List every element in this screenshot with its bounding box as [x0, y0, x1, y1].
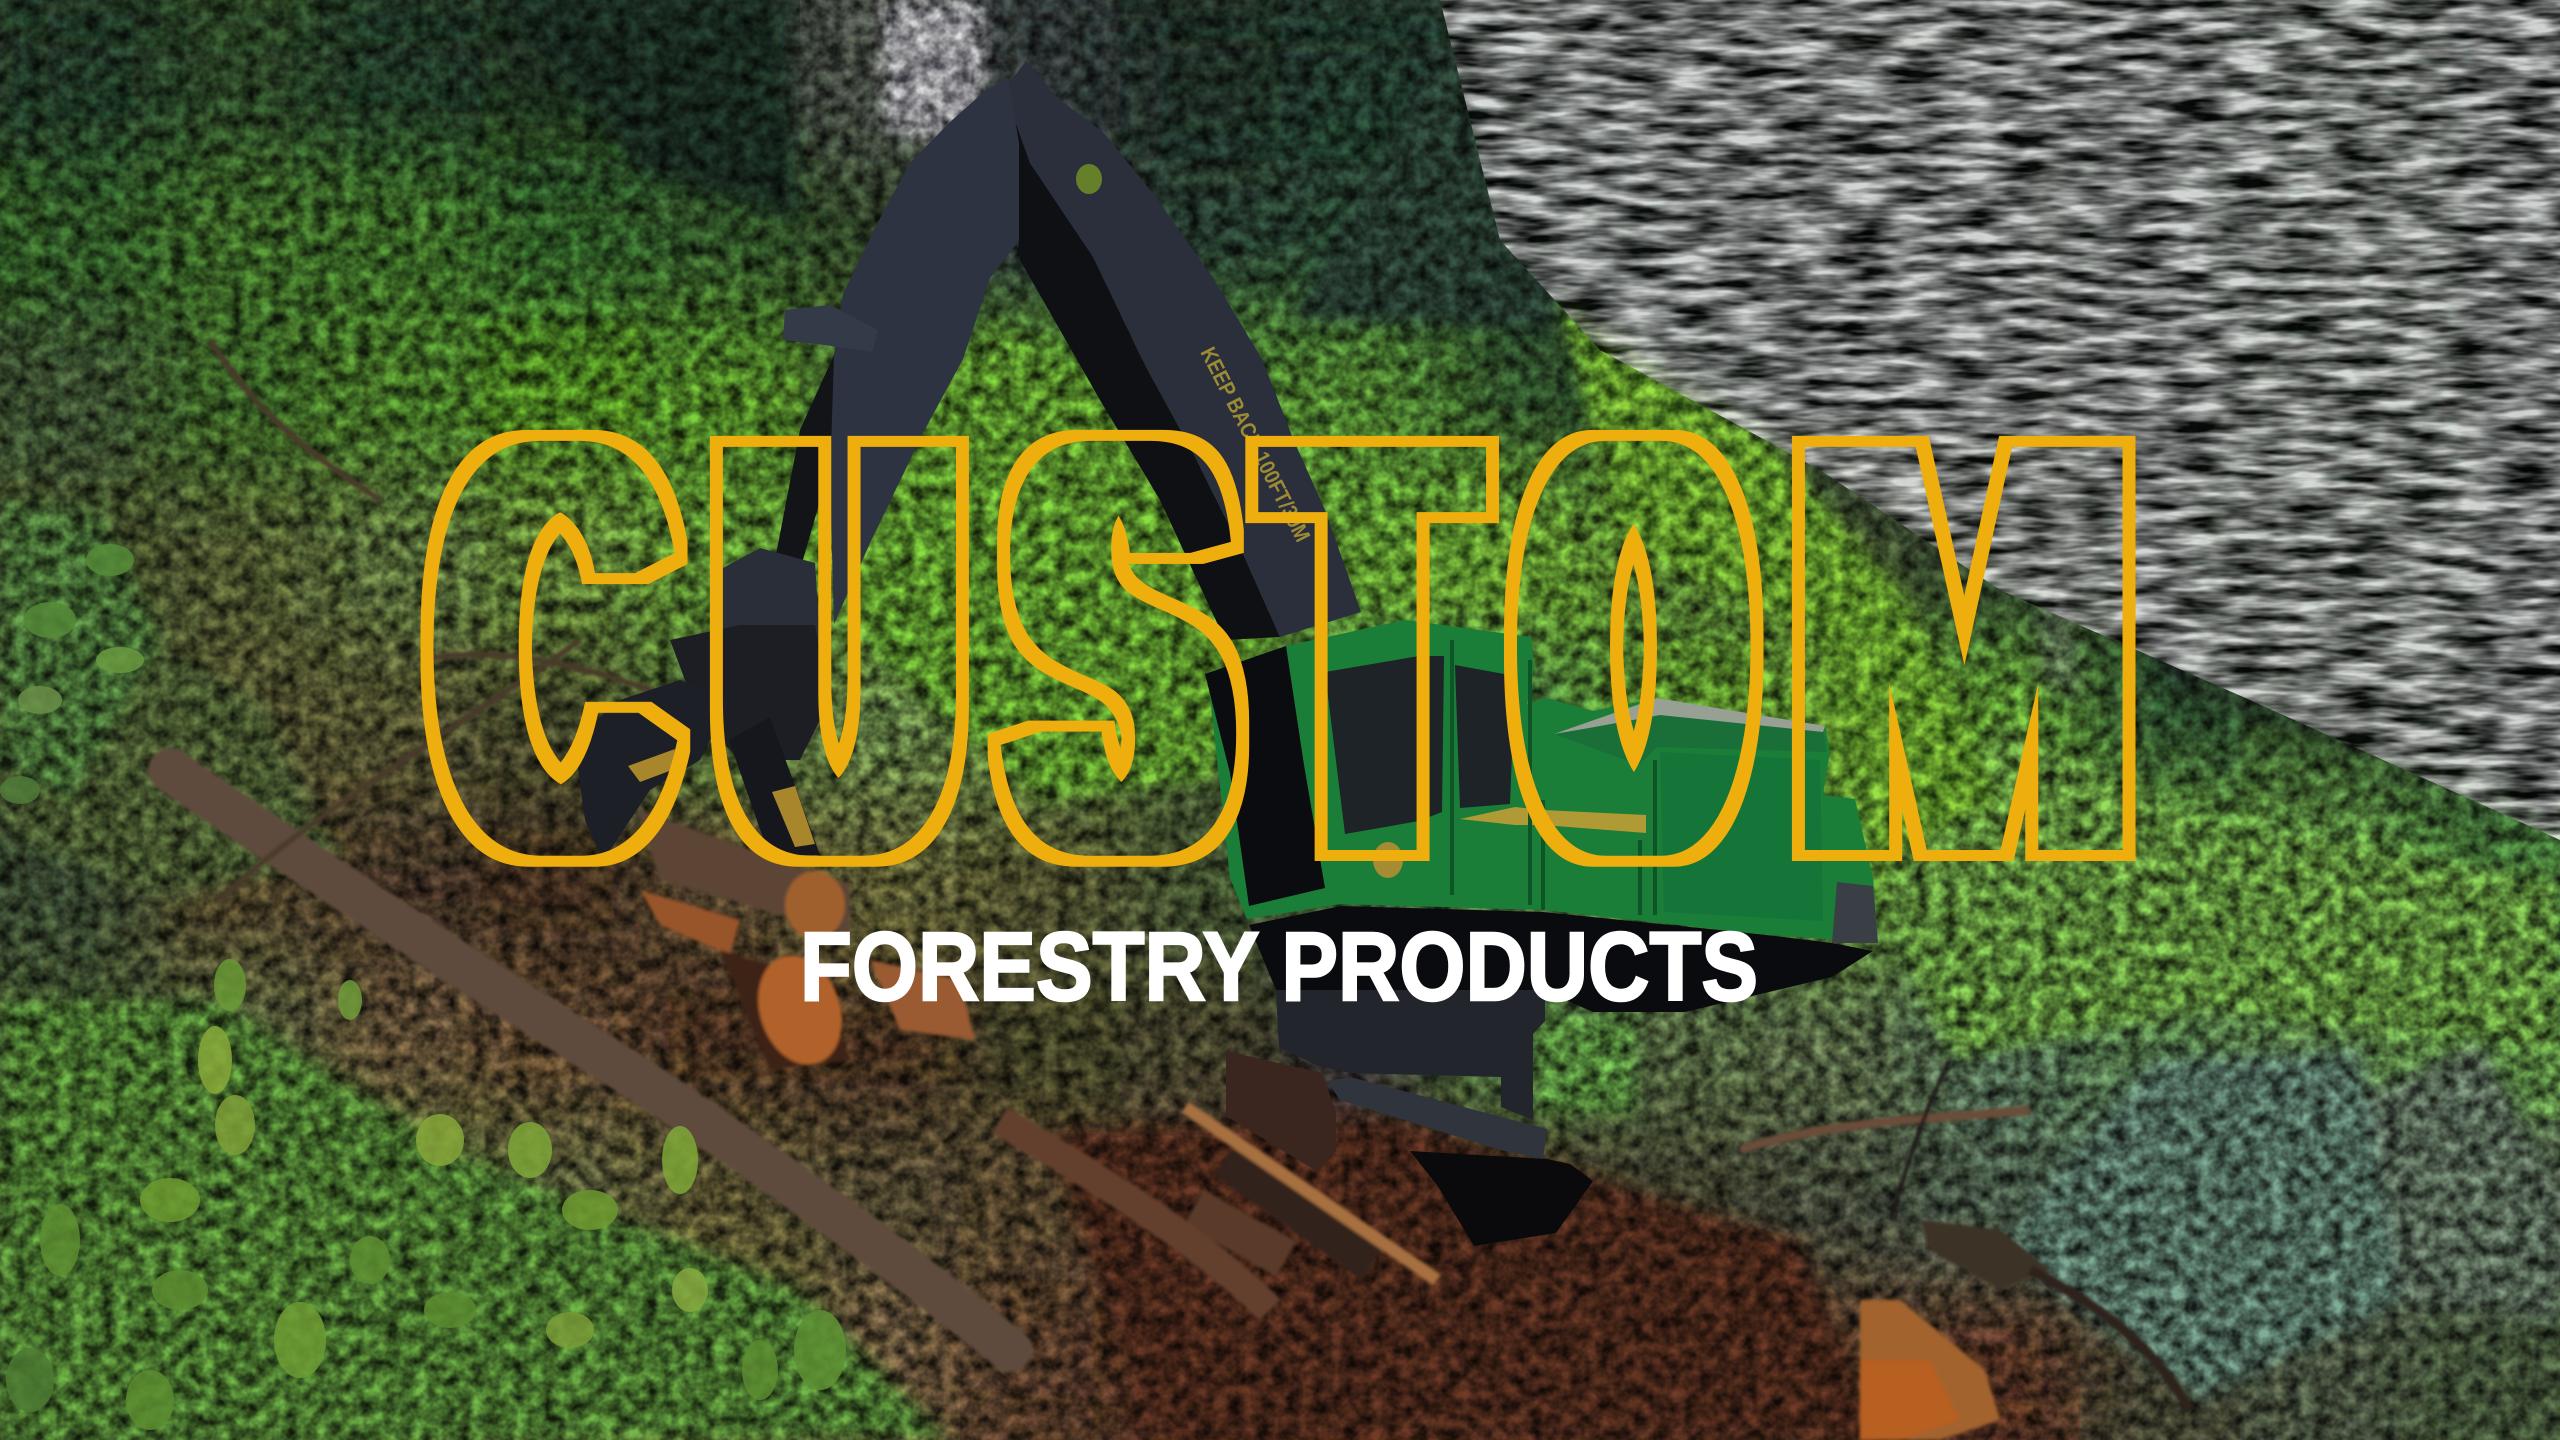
yellow stripe — [1460, 807, 1646, 833]
title: CUSTOM (gold outlined letters) — [441, 319, 2134, 975]
logo badge — [1076, 164, 1102, 194]
letter S: S — [1022, 321, 1218, 975]
lower wheel shadow — [1410, 1151, 1593, 1246]
long log along the slope — [170, 770, 1010, 1350]
gray bumper — [1832, 882, 1878, 943]
engine hood — [1554, 715, 1827, 765]
boom warning text: KEEP BACK 100FT/30M — [1196, 343, 1315, 546]
branches — [1740, 1110, 2030, 1150]
letter T: T — [1277, 321, 1467, 975]
letter M: M — [1794, 321, 2134, 975]
foreground leaves lower left — [0, 544, 846, 1430]
lower undercarriage — [1276, 990, 1545, 1120]
grapple head — [574, 548, 830, 861]
arm bracket — [783, 305, 878, 352]
subtitle: FORESTRY PRODUCTS: FORESTRY PRODUCTS — [800, 912, 1758, 1021]
boom stick with hidden inner frame — [1004, 90, 1280, 640]
letter C: C — [441, 321, 666, 975]
skirt under cab — [1249, 906, 1873, 1012]
front arm — [830, 78, 1019, 624]
engine and cab green body — [1208, 620, 1878, 943]
logs and slash on the slope — [170, 340, 2190, 1440]
rear boom — [1004, 61, 1361, 637]
cab windows — [1325, 656, 1444, 834]
hydraulic hoses and cylinder — [775, 355, 850, 570]
door panel lines — [1452, 640, 1655, 915]
cut log lower right — [1860, 1300, 2000, 1440]
track — [1226, 1051, 1336, 1172]
letter U: U — [731, 319, 948, 975]
side panel — [1660, 752, 1823, 921]
black guard — [1205, 646, 1325, 906]
deere badge — [1373, 842, 1403, 878]
grappled log — [637, 809, 850, 935]
letter O: O — [1534, 320, 1733, 974]
felled logs center — [1194, 1207, 1286, 1259]
texture: conifer branches — [1440, 0, 2560, 840]
machine: John Deere forestry excavator — [574, 61, 1878, 1246]
track frame — [1327, 1077, 1547, 1159]
log with cut end — [640, 890, 740, 955]
